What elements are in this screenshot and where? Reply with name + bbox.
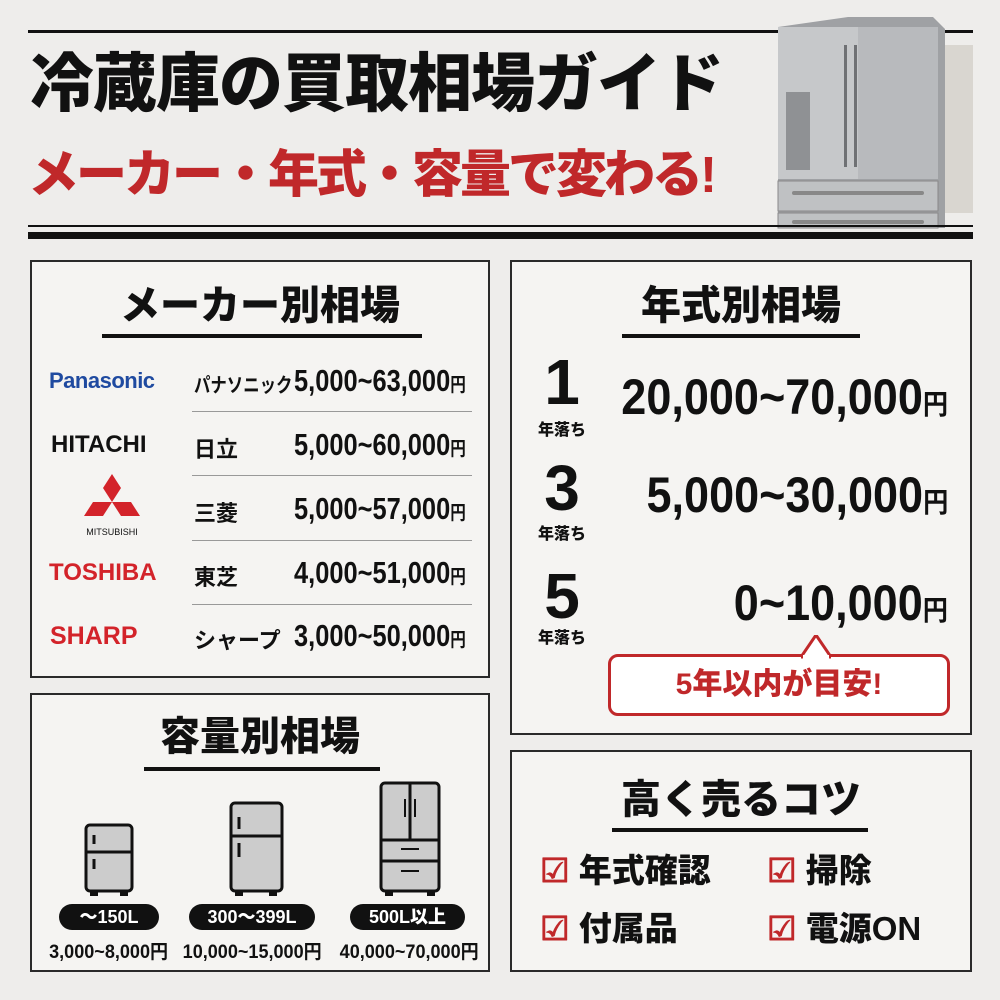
panel: year xyxy=(510,260,972,735)
row: toshiba: TOSHIBA xyxy=(49,559,157,586)
row: 5 years xyxy=(538,560,948,647)
panel: maker: MITSUBISHI xyxy=(86,527,138,537)
heading: tips: 高く売るコツ xyxy=(621,778,861,822)
panel: year: 5 xyxy=(544,560,580,632)
price: small: 3,000~8,000円 xyxy=(50,942,168,963)
row: sharp: シャープ xyxy=(194,628,281,653)
icon: small fridge xyxy=(84,824,134,896)
panel: year: 年落ち xyxy=(538,422,586,439)
panel: year: 年落ち xyxy=(538,630,586,647)
panel: year: 1 xyxy=(544,346,580,418)
tip: cleaning: ☑ 掃除 xyxy=(767,852,872,889)
heading: year: 年式別相場 xyxy=(641,284,841,328)
label: ~150L xyxy=(59,904,159,930)
price: medium: 10,000~15,000円 xyxy=(182,942,321,963)
label: ~150L: 〜150L xyxy=(79,907,139,927)
label: 500L: 500L以上 xyxy=(369,907,446,927)
panel: capacity xyxy=(30,693,490,972)
tip: power on: ☑ 電源ON xyxy=(767,910,921,947)
callout: 5年以内が目安! xyxy=(676,668,882,701)
row: panasonic: Panasonic xyxy=(49,368,155,393)
row: 1 year xyxy=(538,346,948,439)
row: hitachi xyxy=(51,427,466,462)
panel: year: 5,000~30,000円 xyxy=(646,467,948,523)
panel: year: 20,000~70,000円 xyxy=(621,369,948,425)
row: toshiba: 東芝 xyxy=(194,565,238,590)
panel: year: 3 xyxy=(544,452,580,524)
tip: accessories: ☑ 付属品 xyxy=(540,910,678,947)
panel: year: 0~10,000円 xyxy=(734,575,948,631)
row: hitachi: 5,000~60,000円 xyxy=(294,427,466,462)
icon: medium fridge xyxy=(230,802,284,896)
top rule xyxy=(28,30,973,33)
row: mitsubishi: 三菱 xyxy=(194,501,238,526)
heading: maker: メーカー別相場 xyxy=(120,284,400,328)
title: 冷蔵庫の買取相場ガイド xyxy=(30,48,723,120)
row: sharp: SHARP xyxy=(50,622,138,650)
row: toshiba: 4,000~51,000円 xyxy=(294,555,466,590)
row: mitsubishi xyxy=(84,474,466,537)
row: hitachi: HITACHI xyxy=(51,431,147,458)
row: sharp xyxy=(50,618,466,653)
price: large: 40,000~70,000円 xyxy=(339,942,478,963)
row: panasonic: パナソニック xyxy=(194,375,292,397)
tip: year check: ☑ 年式確認 xyxy=(540,852,711,889)
heading: capacity: 容量別相場 xyxy=(160,715,360,759)
label: 300~399L xyxy=(189,904,315,930)
fridge photo xyxy=(778,17,973,228)
row: panasonic xyxy=(49,363,466,398)
label: 500L xyxy=(350,904,465,930)
icon: large fridge xyxy=(380,782,440,896)
panel: maker xyxy=(30,260,490,678)
row: hitachi: 日立 xyxy=(194,437,238,462)
row: sharp: 3,000~50,000円 xyxy=(294,618,466,653)
callout xyxy=(608,654,950,716)
row: 3 years xyxy=(538,452,948,543)
panel: year: 年落ち xyxy=(538,526,586,543)
label: 300~399L: 300〜399L xyxy=(207,907,297,927)
row: panasonic: 5,000~63,000円 xyxy=(294,363,466,398)
panel: tips xyxy=(510,750,972,972)
row: toshiba xyxy=(49,555,466,590)
subtitle: メーカー・年式・容量で変わる! xyxy=(28,146,714,203)
row: mitsubishi: 5,000~57,000円 xyxy=(294,491,466,526)
